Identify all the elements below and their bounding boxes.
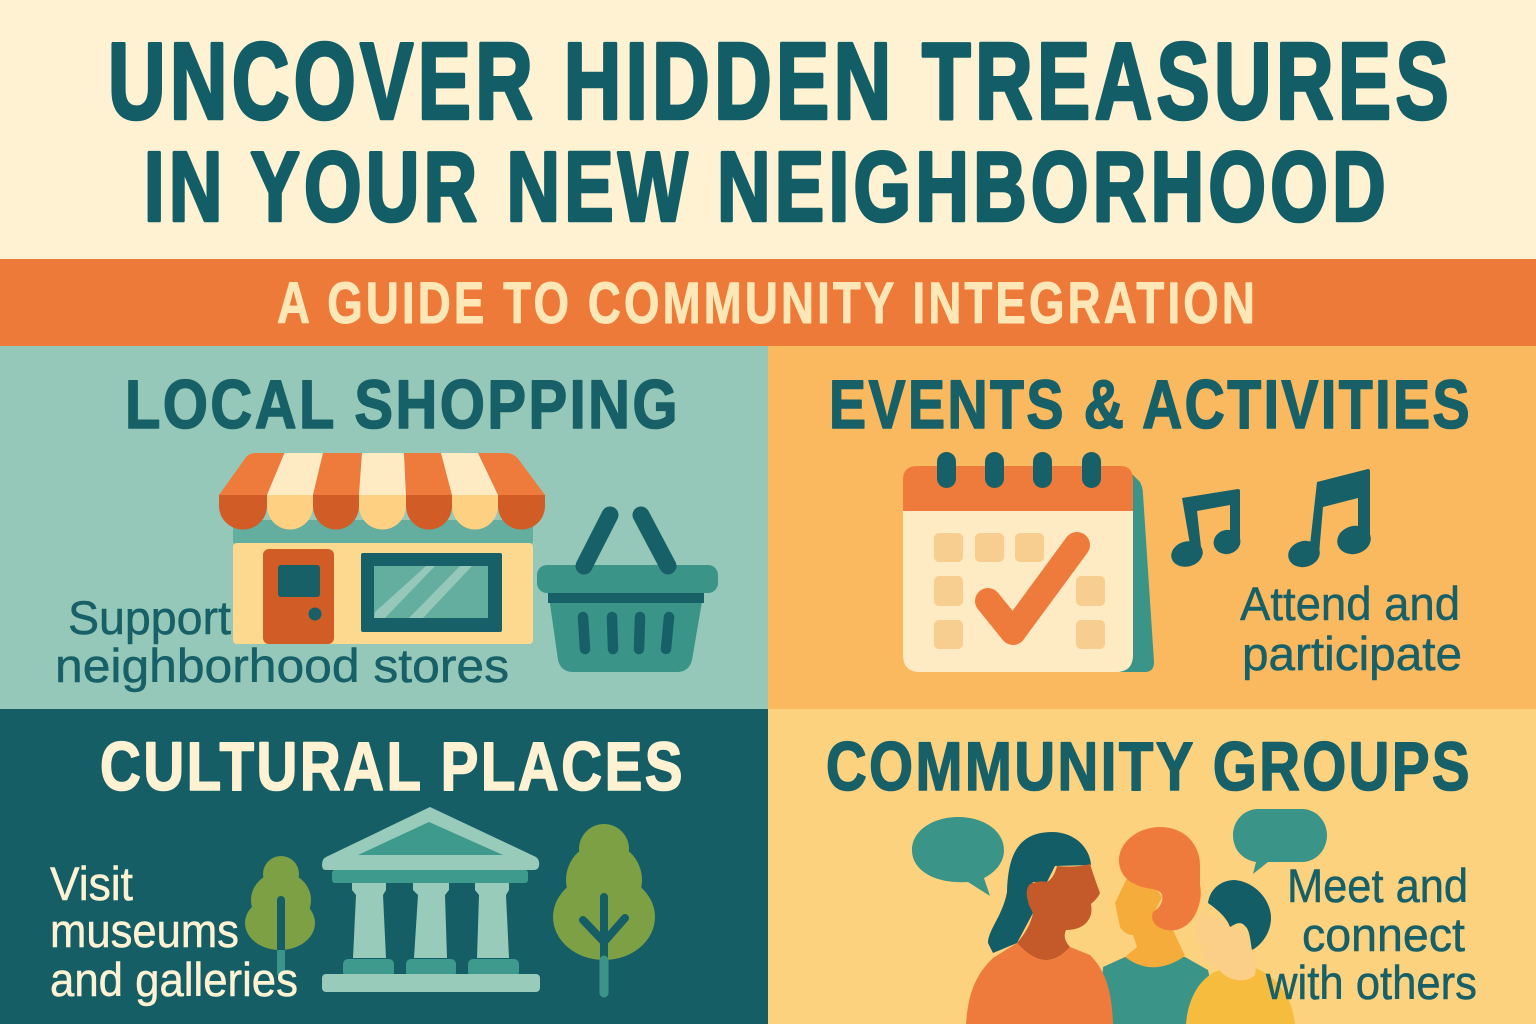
icon: speech bubble left [912, 817, 1004, 896]
panel: community groups [768, 709, 1536, 1024]
text: community groups: Meet and [1287, 859, 1468, 912]
text: community groups: connect [1302, 908, 1465, 961]
heading: local shopping: LOCAL SHOPPING [125, 366, 680, 443]
title [0, 0, 1536, 259]
text: cultural places [50, 857, 298, 1006]
subtitle banner: A GUIDE TO COMMUNITY INTEGRATION [277, 271, 1258, 336]
text: events and activities [1240, 577, 1462, 680]
icon: left tree [245, 856, 315, 975]
icon: music note right [1285, 469, 1374, 571]
icon: storefront [219, 453, 545, 644]
text: community groups [1265, 859, 1477, 1009]
icon: calendar [903, 452, 1154, 672]
icon: shopping basket [537, 515, 718, 672]
person: centre [1100, 827, 1220, 1024]
text: events and activities: participate [1242, 627, 1462, 680]
panel: events and activities [768, 346, 1536, 709]
text: events and activities: Attend and [1240, 577, 1460, 630]
person: right [1186, 880, 1295, 1024]
icon: music note left [1168, 489, 1243, 570]
text: local shopping: neighborhood stores [55, 639, 509, 692]
text: local shopping [55, 591, 509, 692]
text: cultural places: Visit [50, 857, 133, 910]
icon: museum building [322, 807, 540, 992]
panel: local shopping [0, 346, 768, 709]
panel: cultural places [0, 709, 768, 1024]
illustration: people group [966, 827, 1295, 1024]
text: cultural places: and galleries [50, 953, 298, 1006]
text: cultural places: museums [50, 904, 239, 957]
text: local shopping: Support [68, 591, 231, 644]
person: woman [966, 832, 1113, 1024]
text: community groups: with others [1265, 956, 1477, 1009]
icon: speech bubble right [1233, 809, 1327, 874]
icon: right tree [553, 824, 655, 993]
subtitle banner [0, 259, 1536, 346]
heading: cultural places: CULTURAL PLACES [100, 728, 685, 805]
